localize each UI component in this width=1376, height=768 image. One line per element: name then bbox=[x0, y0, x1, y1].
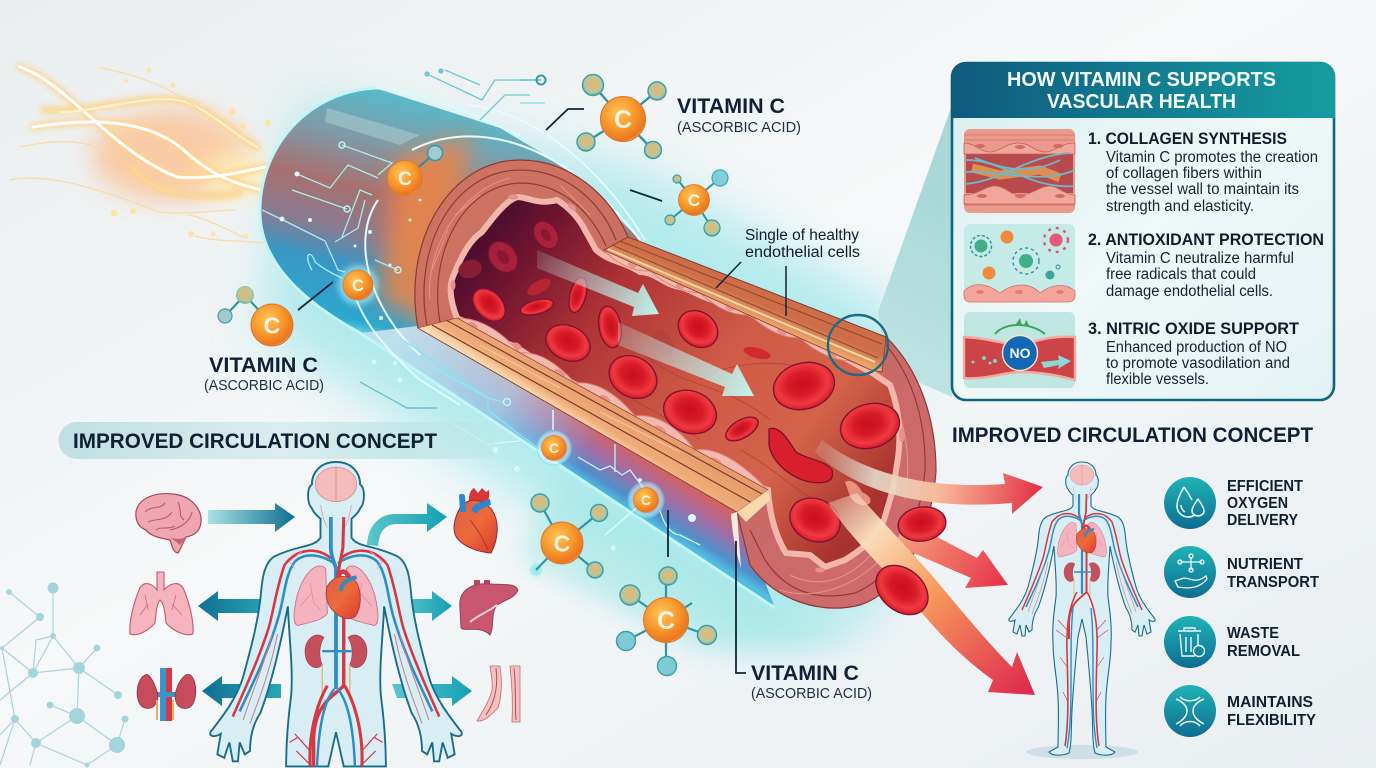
text: nitric oxide support: Enhanced production of NO bbox=[1106, 339, 1287, 356]
label: vitamin C left: VITAMIN C bbox=[209, 354, 318, 377]
benefit: waste removal: WASTE bbox=[1227, 625, 1279, 642]
label: endothelial cells: Single of healthy bbox=[745, 227, 859, 244]
illustration: antioxidant bbox=[964, 224, 1075, 302]
icon: heart bbox=[454, 488, 497, 553]
top vessel wall strip bbox=[604, 237, 886, 372]
molecule: lower right bbox=[616, 567, 716, 676]
icon: brain bbox=[136, 494, 201, 553]
text: nitric oxide support: to promote vasodilation and bbox=[1106, 355, 1290, 372]
benefit: maintains flexibility bbox=[1164, 685, 1316, 737]
blood flow arrows bbox=[537, 250, 754, 396]
heading: improved circulation right: IMPROVED CIRCULATION CONCEPT bbox=[952, 423, 1313, 447]
outward red flow arrows bbox=[815, 440, 1043, 695]
text: antioxidant protection: Vitamin C neutralize harmful bbox=[1106, 250, 1294, 267]
panel: how vitamin C supports vascular health bbox=[951, 62, 1335, 400]
benefit: oxygen delivery: OXYGEN bbox=[1227, 495, 1288, 512]
callout wedge to panel bbox=[878, 105, 952, 397]
heading: improved circulation left bbox=[59, 422, 495, 459]
label: endothelial cells bbox=[716, 227, 860, 316]
text: collagen synthesis bbox=[1088, 129, 1318, 215]
benefit: oxygen delivery bbox=[1164, 477, 1303, 529]
text: collagen synthesis: of collagen fibers within bbox=[1106, 165, 1262, 182]
icon: lungs bbox=[130, 572, 193, 635]
outer vessel tube with circuit pattern bbox=[260, 88, 775, 608]
label: vitamin C bottom: (ASCORBIC ACID) bbox=[751, 685, 872, 702]
leader lines: lower bbox=[668, 510, 746, 673]
text: collagen synthesis: strength and elasticity. bbox=[1106, 198, 1254, 215]
benefit: waste removal bbox=[1164, 616, 1300, 668]
text: collagen synthesis: Vitamin C promotes the creation bbox=[1106, 149, 1318, 166]
illustration: nitric oxide: NO bbox=[1010, 345, 1031, 361]
glow molecule two bbox=[605, 482, 664, 535]
text: antioxidant protection: 2. ANTIOXIDANT PROTECTION bbox=[1088, 230, 1324, 249]
leader line: top molecule bbox=[546, 109, 584, 130]
label: vitamin C left: (ASCORBIC ACID) bbox=[204, 377, 324, 394]
illustration: nitric oxide bbox=[964, 312, 1075, 388]
leader line: second molecule bbox=[630, 190, 662, 201]
human figure left bbox=[210, 462, 462, 766]
arrow: from kidneys bbox=[202, 676, 281, 706]
icon: leg vessels bbox=[477, 666, 520, 722]
icon: liver bbox=[460, 580, 518, 635]
bottom vessel wall strip bbox=[418, 318, 770, 568]
text: antioxidant protection: free radicals that could bbox=[1106, 266, 1256, 283]
energy light streaks bbox=[10, 67, 271, 243]
arrow: to legs bbox=[392, 676, 472, 706]
arrow: to heart bbox=[367, 503, 447, 546]
icon: kidneys bbox=[137, 668, 196, 721]
detail magnifier circle bbox=[828, 315, 888, 375]
artery wall cut-away bbox=[415, 160, 936, 608]
benefit: nutrient transport bbox=[1164, 546, 1319, 598]
molecule: top bbox=[577, 74, 666, 158]
label: vitamin C top bbox=[677, 95, 801, 136]
left arrows behind figure bbox=[198, 503, 472, 706]
label: vitamin C top: VITAMIN C bbox=[677, 95, 785, 118]
text: nitric oxide support bbox=[1088, 319, 1300, 388]
panel heading: HOW VITAMIN C SUPPORTS bbox=[1007, 69, 1276, 91]
endothelial cell lining bbox=[450, 194, 905, 572]
arrow: to liver bbox=[400, 591, 452, 621]
benefit: oxygen delivery: EFFICIENT bbox=[1227, 478, 1303, 495]
text: antioxidant protection bbox=[1088, 230, 1324, 300]
glow molecule one bbox=[537, 410, 571, 465]
text: collagen synthesis: 1. COLLAGEN SYNTHESIS bbox=[1088, 129, 1287, 148]
panel heading bbox=[951, 62, 1335, 118]
label: vitamin C bottom bbox=[751, 662, 872, 702]
text: nitric oxide support: 3. NITRIC OXIDE SUPPORT bbox=[1088, 319, 1300, 338]
teal glow around vessel bbox=[260, 100, 900, 650]
benefit: nutrient transport: TRANSPORT bbox=[1227, 574, 1319, 591]
ground shadow bbox=[1026, 745, 1138, 759]
leader line: left molecule bbox=[298, 282, 333, 310]
benefit: nutrient transport: NUTRIENT bbox=[1227, 556, 1303, 573]
text: collagen synthesis: the vessel wall to maintain its bbox=[1106, 181, 1299, 198]
molecule: left bbox=[218, 286, 293, 346]
arrow: to brain bbox=[208, 503, 295, 532]
illustration: collagen bbox=[964, 129, 1075, 213]
benefit: waste removal: REMOVAL bbox=[1227, 643, 1300, 660]
escaping red blood cells bbox=[866, 504, 948, 625]
molecule: lower big bbox=[530, 494, 608, 578]
text: nitric oxide support: flexible vessels. bbox=[1106, 371, 1209, 388]
molecule: tube lower bbox=[338, 265, 378, 305]
molecule: second upper bbox=[665, 170, 728, 236]
red blood cells bbox=[456, 216, 905, 550]
benefit: maintains flexibility: MAINTAINS bbox=[1227, 694, 1313, 711]
text: antioxidant protection: damage endothelial cells. bbox=[1106, 283, 1273, 300]
label: vitamin C left bbox=[204, 354, 324, 394]
label: vitamin C bottom: VITAMIN C bbox=[751, 662, 859, 685]
molecular network decoration bbox=[0, 582, 128, 768]
top-right circuit lines bbox=[425, 69, 546, 120]
benefit: oxygen delivery: DELIVERY bbox=[1227, 512, 1298, 529]
panel heading: VASCULAR HEALTH bbox=[1047, 91, 1236, 113]
molecule: tube upper bbox=[388, 146, 442, 196]
vessel lumen bbox=[451, 197, 899, 567]
benefit: maintains flexibility: FLEXIBILITY bbox=[1227, 712, 1316, 729]
human figure right bbox=[1009, 462, 1155, 755]
heading: improved circulation left: IMPROVED CIRCULATION CONCEPT bbox=[73, 429, 437, 453]
label: vitamin C top: (ASCORBIC ACID) bbox=[677, 119, 801, 136]
arrow: from lungs bbox=[198, 591, 270, 621]
label: endothelial cells: endothelial cells bbox=[745, 244, 860, 261]
